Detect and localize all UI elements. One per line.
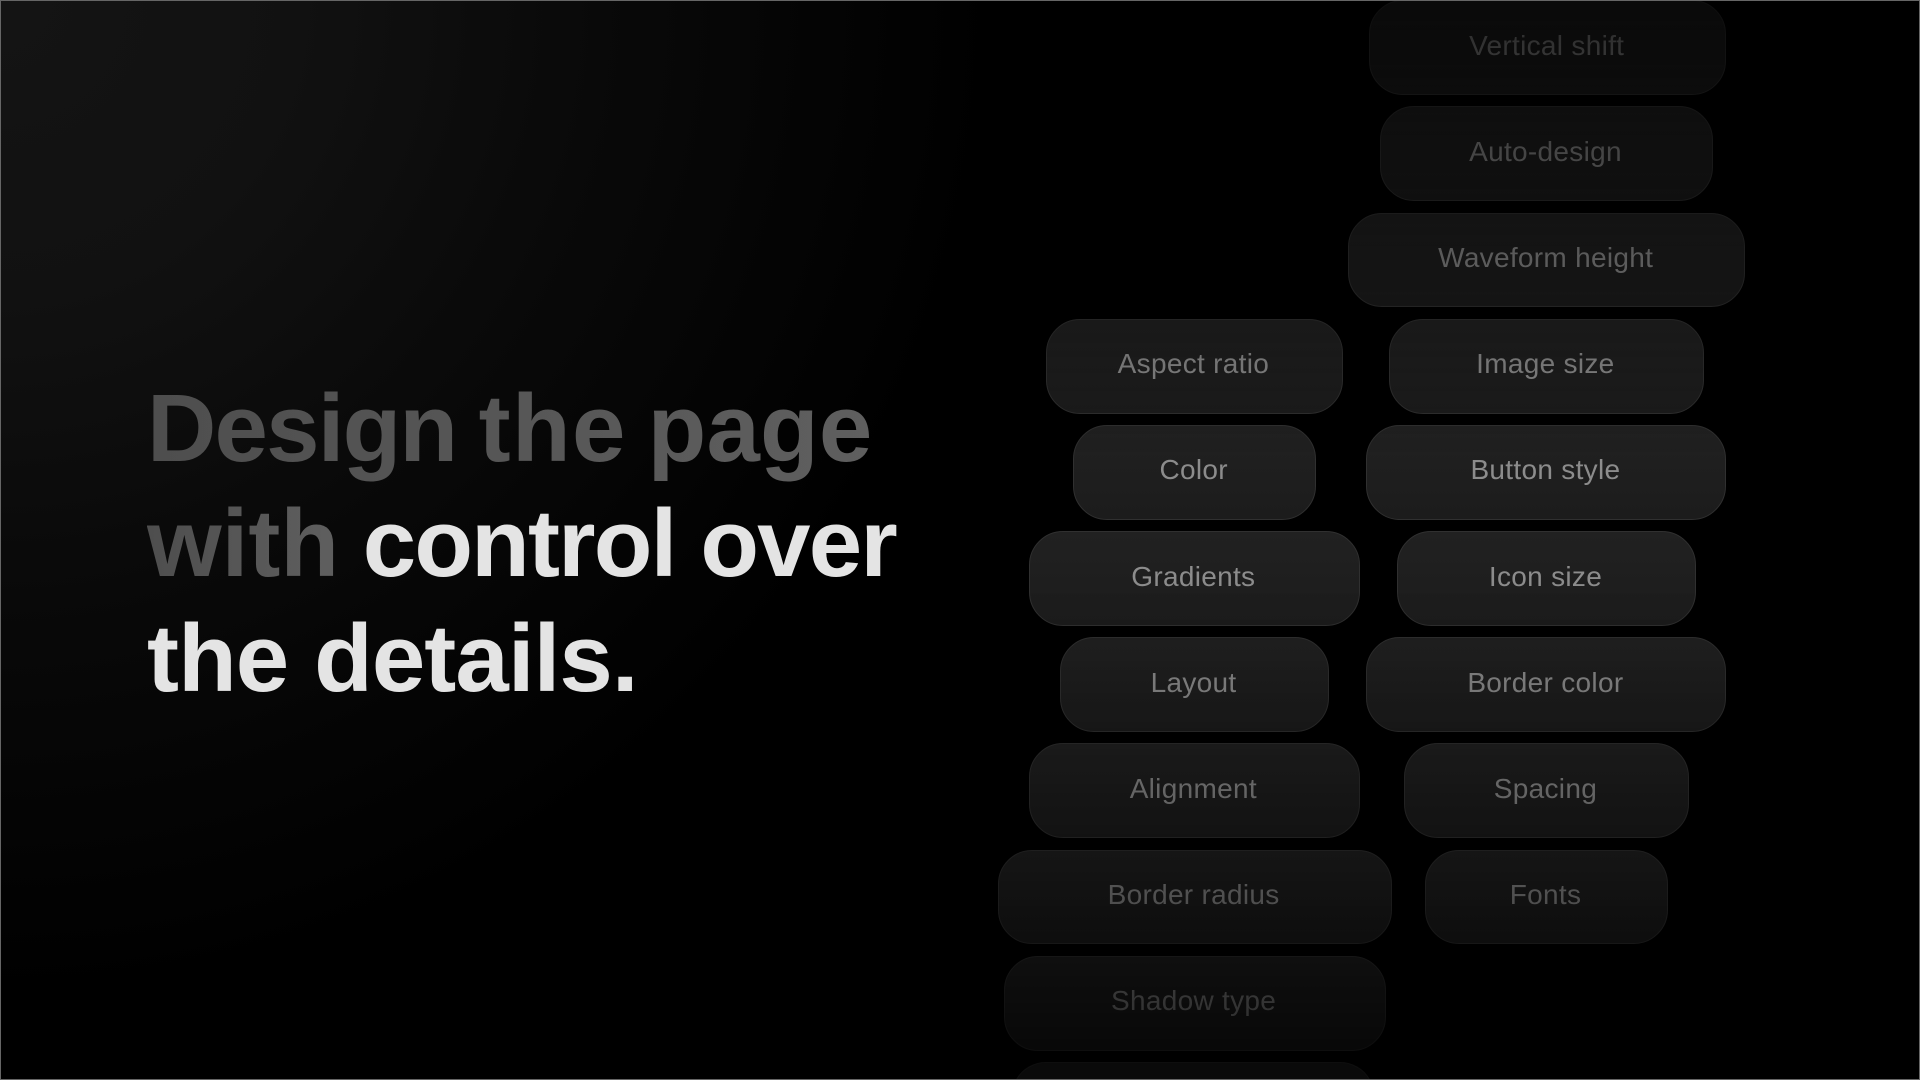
chip: Alignment: Alignment [1130,773,1257,804]
chip: Alignment [1029,743,1360,838]
chip: Vertical shift: Vertical shift [1469,30,1624,61]
chip: Border radius: Border radius [1108,879,1280,910]
chip: Border radius [998,850,1392,944]
chip: Waveform height: Waveform height [1438,242,1653,273]
chip: Waveform height [1348,213,1745,307]
chip: cut-off bottom chip [1016,1062,1370,1079]
chip: Auto-design: Auto-design [1469,136,1622,167]
chip: Spacing [1404,743,1689,838]
chip: Fonts: Fonts [1510,879,1581,910]
chip: Spacing: Spacing [1494,773,1597,804]
chip: Image size [1389,319,1704,414]
chip: Auto-design [1380,106,1713,201]
chip: Shadow type [1004,956,1386,1051]
chip: Color: Color [1159,454,1228,485]
chip: Aspect ratio: Aspect ratio [1118,348,1269,379]
chip: Icon size [1397,531,1696,626]
chip: Button style: Button style [1470,454,1620,485]
chip: Layout: Layout [1151,667,1237,698]
chip: Gradients: Gradients [1131,561,1255,592]
chip: Button style [1366,425,1726,520]
panel: settings chips [998,1,1745,1079]
title: the details. [147,605,638,712]
chip: Shadow type: Shadow type [1111,985,1276,1016]
chip: Vertical shift [1369,0,1726,95]
chip: Aspect ratio [1046,319,1343,414]
title: with control over [147,490,896,597]
chip: Border color [1366,637,1726,732]
title [147,392,896,712]
chip: Image size: Image size [1476,348,1615,379]
chip: Gradients [1029,531,1360,626]
chip: Border color: Border color [1467,667,1623,698]
chip: Layout [1060,637,1329,732]
chip: Icon size: Icon size [1489,561,1602,592]
chip: Fonts [1425,850,1668,944]
chip: Color [1073,425,1316,520]
